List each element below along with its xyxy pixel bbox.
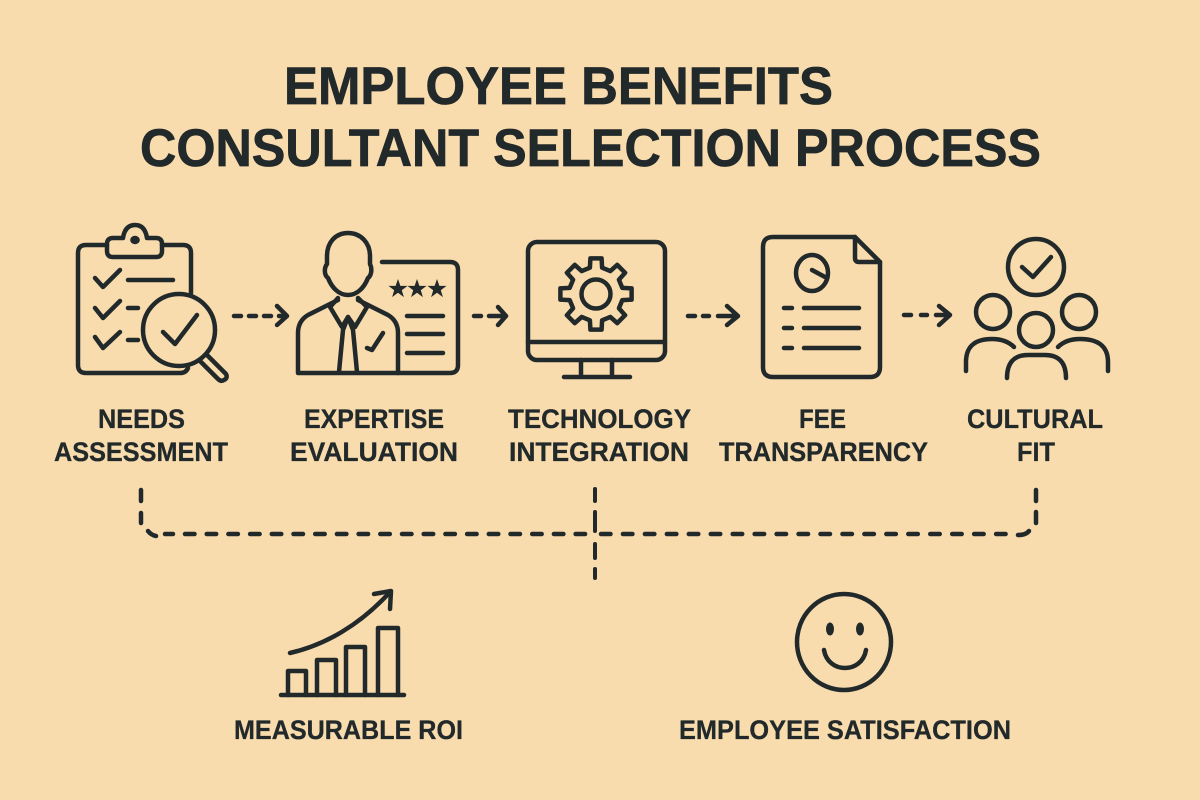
label: expertise evaluation: EXPERTISE [304,404,444,434]
icon: clipboard with magnifier [78,225,227,381]
label: expertise evaluation: EVALUATION [290,437,458,467]
label: cultural fit: CULTURAL [967,404,1103,434]
label: needs assessment [54,404,228,467]
arrow: needs to expertise [234,306,287,325]
label: measurable ROI: MEASURABLE ROI [234,715,463,745]
arrow: technology to fee [688,306,738,325]
icon: monitor with gear [528,242,665,377]
arrow: expertise to technology [474,307,506,325]
title [140,57,1041,178]
label: expertise evaluation [290,404,458,467]
label: technology integration: TECHNOLOGY [508,404,691,434]
title: EMPLOYEE BENEFITS [284,57,833,116]
label: fee transparency: FEE [799,404,846,434]
icon: rising bar chart [281,591,404,695]
icon: fee document [763,237,880,377]
arrow: fee to culture [904,306,950,325]
icon: consultant with rating card [298,233,458,373]
label: needs assessment: NEEDS [98,404,185,434]
label: employee satisfaction: EMPLOYEE SATISFACTION [679,715,1011,745]
label: fee transparency: TRANSPARENCY [719,437,928,467]
dashed connector to outcomes [141,489,1036,578]
icon: smiley face [797,594,891,690]
step labels [54,404,1103,467]
label: needs assessment: ASSESSMENT [54,437,228,467]
icon: team with approval check [966,239,1108,378]
label: fee transparency [719,404,928,467]
title: CONSULTANT SELECTION PROCESS [140,119,1041,178]
label: technology integration: INTEGRATION [509,437,689,467]
label: cultural fit [967,404,1103,467]
label: technology integration [508,404,691,467]
label: cultural fit: FIT [1017,437,1055,467]
